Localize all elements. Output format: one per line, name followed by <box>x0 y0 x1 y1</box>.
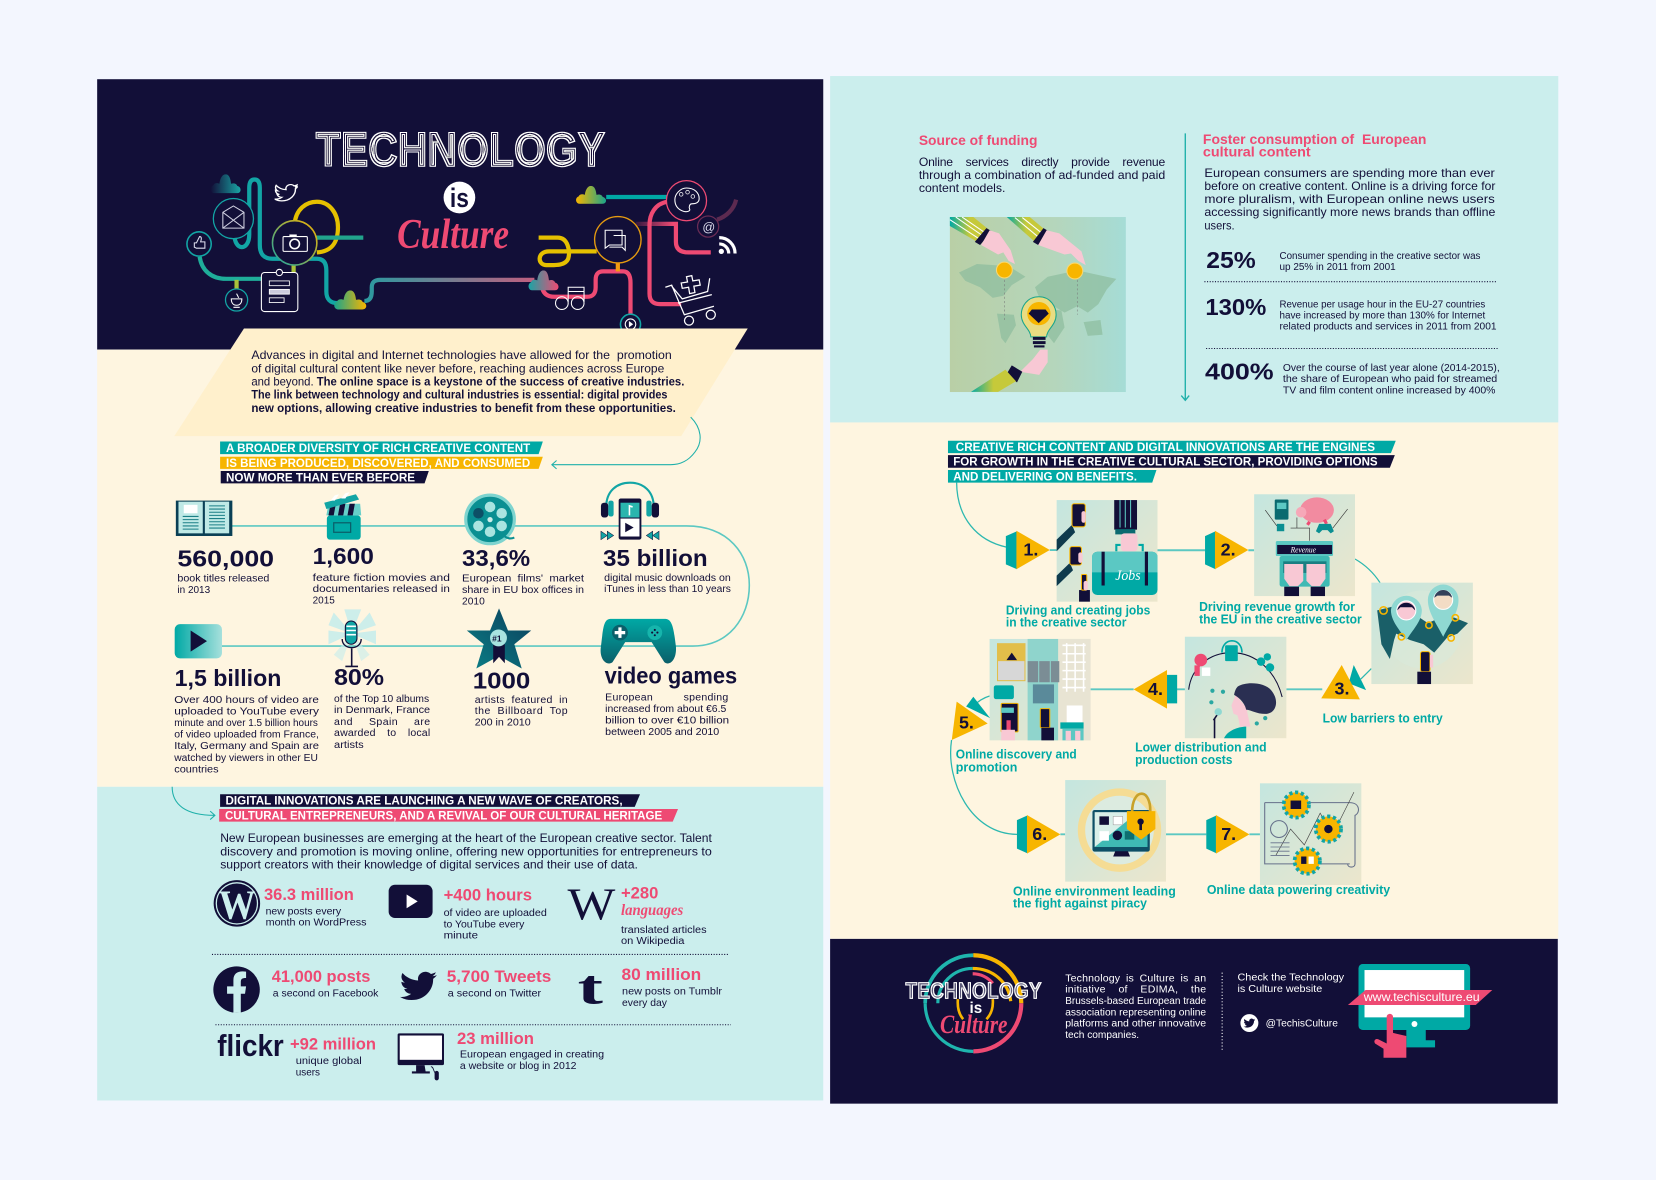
stat: +280 languages: translated articles <box>621 924 707 936</box>
icon: website monitor: www.techisculture.eu <box>1363 991 1480 1004</box>
arrow: to digital banner <box>172 787 215 820</box>
banner: broader diversity: A BROADER DIVERSITY OF RICH CREATIVE CONTENT <box>226 442 530 455</box>
stat: 35 billion: 35 billion <box>603 545 708 571</box>
stat: +280 languages <box>621 883 707 947</box>
banner: digital innovations: CULTURAL ENTREPRENEURS, AND A REVIVAL OF OUR CULTURAL HERITAGE <box>225 810 662 823</box>
stat: +400 hours <box>444 886 547 942</box>
text: foster consumption <box>1203 132 1496 233</box>
illustration: jobs: Jobs <box>1115 568 1141 584</box>
panel: intro parallelogram: of digital cultural content like never before, reaching audiences across Europe <box>251 361 665 375</box>
stat: 1,600: 2015 <box>313 595 335 607</box>
stat: 33,6%: 2010 <box>462 595 485 607</box>
caption 1: Driving and creating jobs <box>1006 603 1150 617</box>
panel: right page cream section <box>830 422 1558 939</box>
stat: +280 languages: languages <box>621 902 683 919</box>
stat: +92 million: users <box>296 1067 320 1079</box>
panel: right page mint section <box>830 76 1558 422</box>
step 4 marker <box>1134 670 1177 709</box>
text: foster consumption: cultural content <box>1203 145 1311 161</box>
text: about: platforms and other innovative <box>1065 1018 1206 1030</box>
stat: 23 million: European engaged in creating <box>460 1049 604 1061</box>
text: foster consumption: more pluralism, with European online news users <box>1204 192 1495 206</box>
caption 5: promotion <box>956 760 1017 774</box>
icon: clipboard <box>261 269 298 312</box>
stat: 1000: the Billboard Top <box>475 705 568 717</box>
icon: microphone <box>328 609 376 666</box>
icon: flickr: flickr <box>217 1029 284 1063</box>
icon: tumblr: t <box>578 960 603 1014</box>
banner: broader diversity: IS BEING PRODUCED, DISCOVERED, AND CONSUMED <box>226 457 530 470</box>
panel: intro parallelogram: Advances in digital and Internet technologies have allowed for the promotion <box>251 348 672 362</box>
stat: 36.3 million: month on WordPress <box>266 917 366 929</box>
stat: 560,000 <box>177 546 274 596</box>
text: about: Brussels-based European trade <box>1065 995 1206 1007</box>
step 1 marker: 1. <box>1023 540 1038 560</box>
stat: 35 billion <box>603 545 731 595</box>
icon: envelope <box>213 199 253 239</box>
stat: video games: increased from about €6.5 <box>605 703 726 715</box>
text: check the website: is Culture website <box>1237 983 1322 995</box>
icon: star ribbon: #1 <box>492 634 502 644</box>
logo: technology is culture: Culture <box>940 1009 1008 1039</box>
stat: 130%: 130% <box>1205 294 1267 320</box>
text: check the website: Check the Technology <box>1237 972 1345 984</box>
text: source of funding: through a combination of ad-funded and paid <box>919 168 1165 182</box>
tech pipes diagram <box>200 180 736 315</box>
stat: 560,000: 560,000 <box>177 546 274 572</box>
stat: 80 million: new posts on Tumblr <box>622 986 722 998</box>
caption 2: Driving revenue growth for <box>1199 600 1355 614</box>
illustration: online data <box>1260 783 1361 885</box>
stat: 400%: Over the course of last year alone (2014-2015), <box>1283 362 1500 374</box>
stat: 1,5 billion: countries <box>174 763 219 775</box>
text: new european businesses <box>220 831 712 872</box>
stat: 1000 <box>473 668 568 729</box>
logo: technology is culture <box>905 955 1042 1051</box>
text: foster consumption: European consumers are spending more than ever <box>1204 166 1495 180</box>
stat: 36.3 million <box>264 885 366 929</box>
icon: book <box>176 501 232 536</box>
title: is badge: is <box>450 183 469 213</box>
icon: music player with headphones <box>601 483 659 540</box>
stat: +280 languages: on Wikipedia <box>621 935 684 947</box>
text: new european businesses: discovery and promotion is moving online, offering new opportunities for entrepreneurs to <box>220 844 712 858</box>
text: about: association representing online <box>1065 1006 1206 1018</box>
stat: +400 hours: to YouTube every <box>444 918 525 930</box>
caption 4 <box>1135 741 1267 767</box>
panel: intro parallelogram: and beyond. The online space is a keystone of the success of creative industries. <box>251 374 684 388</box>
stat: 35 billion: digital music downloads on <box>604 572 731 584</box>
text: about: initiative of EDIMA, the <box>1065 984 1206 996</box>
icon: facebook <box>213 966 260 1013</box>
title: Culture: Culture <box>397 211 509 258</box>
logo: technology is culture: TECHNOLOGY <box>905 977 1042 1003</box>
icon: music note <box>556 287 584 309</box>
text: foster consumption: Foster consumption of European <box>1203 132 1426 148</box>
icon: palette <box>666 181 707 221</box>
stat: 80%: artists <box>334 739 364 751</box>
stat: +92 million <box>290 1034 376 1079</box>
caption 2: the EU in the creative sector <box>1199 612 1362 626</box>
stat: 1000: 1000 <box>473 668 530 694</box>
banner: digital innovations: DIGITAL INNOVATIONS ARE LAUNCHING A NEW WAVE OF CREATORS, <box>225 795 623 808</box>
icon: thumb <box>187 232 211 256</box>
icon: twitter outline <box>275 185 298 201</box>
step 6 marker <box>1017 815 1060 854</box>
stat: 560,000: in 2013 <box>177 584 210 596</box>
stat: 5,700 Tweets <box>447 967 551 1000</box>
stat: 80 million: 80 million <box>622 965 701 984</box>
icon: clapperboard <box>324 492 361 540</box>
step 7 marker: 7. <box>1221 824 1236 844</box>
stat: 41,000 posts: a second on Facebook <box>273 988 379 1000</box>
panel: footer <box>830 939 1558 1104</box>
banner: broader diversity <box>220 441 543 485</box>
icon: youtube <box>389 885 433 918</box>
icon: mug <box>225 289 248 311</box>
stat: video games: billion to over €10 billion <box>605 715 729 727</box>
text: new european businesses: support creators with their knowledge of digital services and their use of data. <box>220 858 638 872</box>
banner: engines of growth: CREATIVE RICH CONTENT AND DIGITAL INNOVATIONS ARE THE ENGINES <box>956 441 1375 454</box>
illustration: low barriers map <box>1371 583 1473 684</box>
step 2 marker <box>1205 531 1248 569</box>
stat: 36.3 million: new posts every <box>266 906 342 918</box>
stat: 80 million: every day <box>622 997 668 1009</box>
caption 6 <box>1013 884 1176 911</box>
icon: camera <box>272 221 317 265</box>
connector lines: benefit flow <box>951 483 1380 834</box>
illustration: online discovery <box>990 639 1091 740</box>
title: is badge <box>444 182 475 213</box>
stat: 80%: and Spain are <box>334 716 430 728</box>
text: foster consumption: before on creative content. Online is a driving force for <box>1204 179 1495 193</box>
step 7 marker <box>1206 815 1249 854</box>
title: Technology: TECHNOLOGY <box>316 123 605 177</box>
stat: 80%: 80% <box>334 664 384 690</box>
stat: 1,5 billion: 1,5 billion <box>175 665 281 691</box>
stat: +92 million: unique global <box>296 1055 362 1067</box>
stat: 25%: 25% <box>1206 247 1256 273</box>
caption 2 <box>1199 600 1362 626</box>
stat: 35 billion: iTunes in less than 10 years <box>604 583 731 595</box>
illustration: fight against piracy <box>1065 780 1166 882</box>
icon: game controller <box>601 619 676 663</box>
stat: video games: European spending <box>605 692 728 704</box>
stat: 80%: in Denmark, France <box>334 704 430 716</box>
text: about: Technology is Culture is an <box>1065 972 1206 984</box>
stat: 25%: up 25% in 2011 from 2001 <box>1279 261 1396 273</box>
icon: video play tile <box>175 624 222 658</box>
stat: 36.3 million: 36.3 million <box>264 885 354 904</box>
stat: 1000: 200 in 2010 <box>475 717 531 729</box>
caption 4: production costs <box>1135 753 1232 767</box>
banner: broader diversity: NOW MORE THAN EVER BEFORE <box>226 472 415 485</box>
stat: +280 languages: +280 <box>621 883 658 902</box>
caption 1: in the creative sector <box>1006 616 1127 630</box>
stat: 1,600: 1,600 <box>313 543 374 569</box>
icon: desktop computer <box>398 1033 444 1080</box>
stat: 80 million <box>622 965 722 1009</box>
icon: speech bubbles <box>595 217 641 263</box>
icon: at sign: @ <box>702 220 715 234</box>
banner: digital innovations <box>219 794 678 823</box>
stat: 1,5 billion: uploaded to YouTube every <box>174 705 320 717</box>
stat: 33,6%: share in EU box offices in <box>462 584 584 596</box>
text: about: tech companies. <box>1065 1029 1139 1041</box>
stat: video games <box>605 662 737 738</box>
stat: 1,5 billion: of video uploaded from France, <box>174 728 319 740</box>
caption 5: Online discovery and <box>956 748 1077 762</box>
stat: 23 million <box>457 1029 604 1072</box>
step 1 marker <box>1006 531 1050 569</box>
caption 7: Online data powering creativity <box>1207 883 1390 897</box>
icon: play circle <box>620 314 641 334</box>
arrow: intro to banner <box>552 417 700 469</box>
icon: shopping cart <box>665 276 715 325</box>
stat: 1,600 <box>313 543 450 607</box>
text: source of funding: Online services directly provide revenue <box>919 155 1165 169</box>
step 4 marker: 4. <box>1148 679 1163 699</box>
icon: website monitor <box>1348 964 1492 1058</box>
step 6 marker: 6. <box>1032 824 1047 844</box>
icon: film reel <box>466 495 514 544</box>
stat: 33,6% <box>462 545 584 607</box>
text: foster consumption: accessing significantly more news brands than offline <box>1204 205 1496 219</box>
panel: left page cream section <box>97 350 823 787</box>
stat: 560,000: book titles released <box>177 572 269 584</box>
stat: video games: video games <box>605 662 737 688</box>
stat: 130% <box>1205 294 1497 332</box>
stat: 1,5 billion: Italy, Germany and Spain are <box>174 740 319 752</box>
icon: wikipedia: W <box>567 879 615 929</box>
text: source of funding <box>919 133 1165 195</box>
banner: engines of growth <box>948 441 1396 484</box>
icon: clouds <box>211 174 606 309</box>
stat: 1,5 billion: watched by viewers in other EU <box>173 752 318 764</box>
stat: video games: between 2005 and 2010 <box>605 726 719 738</box>
panel: left page mint section <box>97 787 823 1100</box>
banner: engines of growth: FOR GROWTH IN THE CREATIVE CULTURAL SECTOR, PROVIDING OPTIONS <box>953 456 1378 469</box>
stat: +92 million: +92 million <box>290 1034 376 1053</box>
stat: 1,5 billion: Over 400 hours of video are <box>174 694 319 706</box>
stat: +400 hours: +400 hours <box>444 886 532 905</box>
stat: 33,6%: European films' market <box>462 572 584 584</box>
stat: 5,700 Tweets: 5,700 Tweets <box>447 967 551 986</box>
text: new european businesses: New European businesses are emerging at the heart of the European creative sector. Talent <box>220 831 712 845</box>
stat: 130%: related products and services in 2011 from 2001 <box>1279 320 1497 332</box>
stat: 80%: of the Top 10 albums <box>334 693 429 705</box>
illustration: revenue <box>1254 494 1355 596</box>
caption 1 <box>1006 603 1150 630</box>
step 5 marker <box>952 697 990 740</box>
illustration: jobs <box>1057 500 1158 602</box>
stat: 23 million: a website or blog in 2012 <box>460 1060 577 1072</box>
divider arrow <box>1181 133 1189 400</box>
stat: 400%: the share of European who paid for streamed <box>1283 373 1497 385</box>
illustration: revenue: Revenue <box>1290 544 1316 554</box>
icon: twitter <box>400 972 437 1000</box>
stat: 5,700 Tweets: a second on Twitter <box>448 988 542 1000</box>
stat: 1000: artists featured in <box>475 694 568 706</box>
stat: 1,600: documentaries released in <box>313 583 450 595</box>
step 2 marker: 2. <box>1221 540 1236 560</box>
caption 3: Low barriers to entry <box>1323 712 1443 726</box>
panel: left page header <box>97 79 823 350</box>
stat: 130%: have increased by more than 130% for Internet <box>1279 309 1485 321</box>
stat: 25%: Consumer spending in the creative sector was <box>1279 250 1480 262</box>
icon: twitter badge <box>1240 1014 1258 1032</box>
icon: rss <box>719 238 735 254</box>
text: check the website <box>1237 972 1345 995</box>
illustration: lower distribution costs <box>1185 637 1286 738</box>
panel: intro parallelogram: The link between technology and cultural industries is essential: digital provides <box>251 388 668 402</box>
illustration: funding map with hands <box>950 217 1126 392</box>
icon: star ribbon <box>467 608 531 669</box>
panel: intro parallelogram: new options, allowing creative industries to benefit from these opportunities. <box>251 401 676 415</box>
stat: 1,5 billion <box>173 665 320 775</box>
text: source of funding: Source of funding <box>919 133 1037 149</box>
text: foster consumption: users. <box>1204 219 1235 233</box>
stat: 41,000 posts: 41,000 posts <box>272 967 370 986</box>
stat: 400%: 400% <box>1205 358 1274 384</box>
stat: 400%: TV and film content online increased by 400% <box>1283 384 1495 396</box>
caption 4: Lower distribution and <box>1135 741 1267 755</box>
stat: 80%: awarded to local <box>334 727 430 739</box>
stat: +400 hours: minute <box>444 930 478 942</box>
stat: 25% <box>1206 247 1480 273</box>
stat: +400 hours: of video are uploaded <box>444 907 547 919</box>
text: twitter handle: @TechisCulture <box>1266 1018 1338 1030</box>
icon: at sign <box>698 216 719 237</box>
stat: 80% <box>334 664 430 751</box>
step 3 marker: 3. <box>1335 678 1349 698</box>
icon: wordpress: W <box>219 881 256 927</box>
connector line: stats timeline <box>217 526 749 646</box>
step 3 marker <box>1321 665 1366 699</box>
logo: technology is culture: is <box>970 1000 982 1017</box>
step 5 marker: 5. <box>959 712 974 732</box>
stat: 41,000 posts <box>272 967 379 1000</box>
stat: 400% <box>1205 358 1500 396</box>
stat: 33,6%: 33,6% <box>462 545 531 571</box>
stat: 130%: Revenue per usage hour in the EU-27 countries <box>1279 298 1485 310</box>
stat: 1,600: feature fiction movies and <box>313 572 450 584</box>
text: about <box>1065 972 1206 1041</box>
banner: engines of growth: AND DELIVERING ON BENEFITS. <box>953 471 1137 484</box>
stat: 1,5 billion: minute and over 1.5 billion hours <box>174 717 318 729</box>
text: source of funding: content models. <box>919 181 1005 195</box>
caption 6: Online environment leading <box>1013 884 1176 898</box>
caption 5 <box>956 748 1077 774</box>
panel: intro parallelogram <box>174 328 748 436</box>
caption 6: the fight against piracy <box>1013 897 1147 911</box>
stat: 23 million: 23 million <box>457 1029 534 1048</box>
